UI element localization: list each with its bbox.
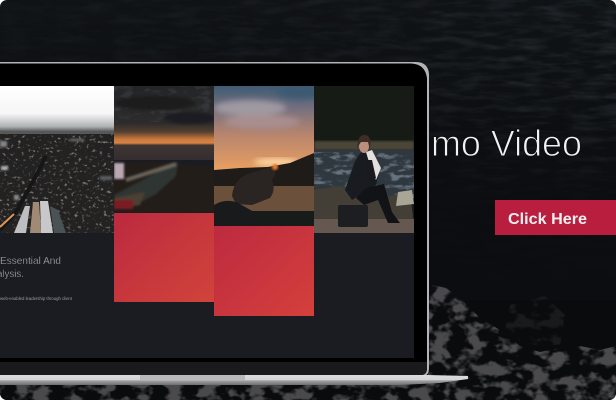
laptop	[0, 62, 468, 385]
photo: woman seated by water	[314, 86, 414, 233]
screen small caption: web-enabled leadership through client	[0, 296, 73, 301]
screen background	[0, 86, 414, 359]
laptop base	[0, 375, 468, 385]
screen heading: Essential And	[0, 255, 61, 267]
laptop lid frame	[0, 62, 429, 376]
button: Click Here: Click Here	[508, 211, 587, 228]
base notch	[140, 375, 245, 380]
red panel right	[214, 226, 314, 316]
photo: boat at sunset	[114, 86, 216, 212]
button: Click Here	[495, 200, 616, 235]
woman figure	[338, 135, 400, 227]
lower bezel	[0, 362, 427, 375]
photo: aerial city	[0, 86, 114, 233]
red panel left	[114, 213, 214, 302]
screen bottom black strip	[0, 358, 414, 362]
photo: hand and sun	[214, 86, 314, 225]
title: Demo Video: mo Video	[431, 123, 582, 164]
